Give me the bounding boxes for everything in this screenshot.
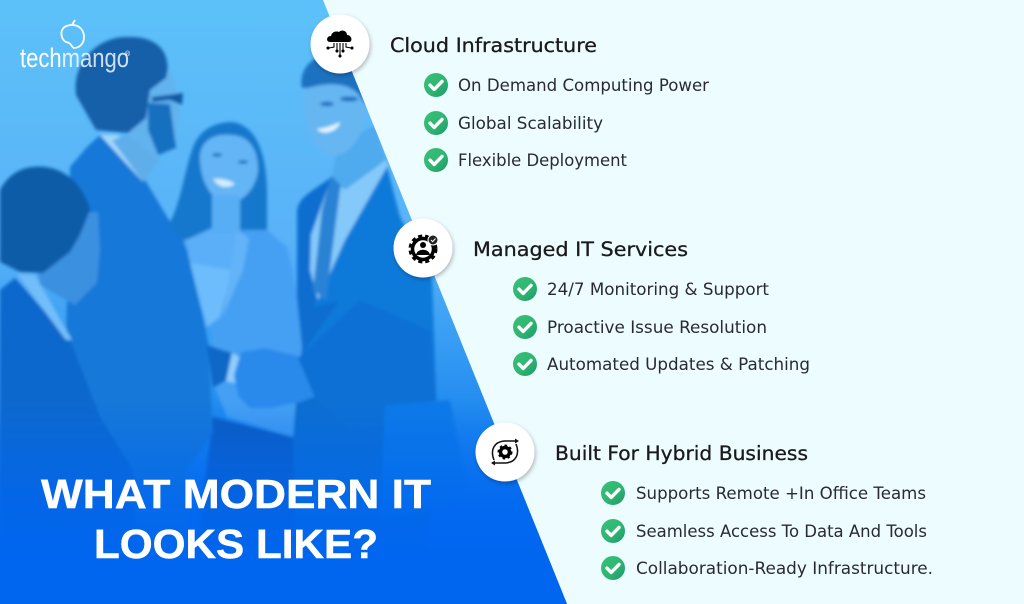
item: Global Scalability	[424, 111, 603, 135]
logo: techmango	[20, 20, 131, 73]
item: Supports Remote +In Office Teams: Supports Remote +In Office Teams	[636, 484, 926, 503]
logo mark: mango outline	[61, 20, 84, 48]
woman	[168, 120, 304, 522]
registered mark: ®	[125, 50, 131, 58]
handshake	[232, 302, 431, 408]
item: Seamless Access To Data And Tools: Seamless Access To Data And Tools	[636, 522, 927, 541]
item: Automated Updates & Patching: Automated Updates & Patching	[547, 355, 810, 374]
logo wordmark: techmango	[20, 43, 129, 73]
item: On Demand Computing Power	[424, 73, 709, 97]
item: Collaboration-Ready Infrastructure.	[601, 556, 933, 580]
icon: cloud network	[310, 14, 370, 74]
icon: gear with person	[394, 218, 452, 278]
item: Flexible Deployment: Flexible Deployment	[458, 151, 628, 170]
right man	[292, 58, 437, 500]
section: Cloud Infrastructure	[310, 14, 709, 172]
bottom gradient fade	[0, 417, 567, 604]
item: Proactive Issue Resolution: Proactive Issue Resolution	[547, 318, 767, 337]
item: Flexible Deployment	[424, 148, 628, 172]
title: LOOKS LIKE?	[94, 521, 378, 567]
heading: Managed IT Services	[473, 238, 688, 261]
item: Automated Updates & Patching	[513, 352, 810, 376]
item: 24/7 Monitoring & Support	[513, 277, 770, 301]
front man	[0, 164, 127, 503]
item: 24/7 Monitoring & Support: 24/7 Monitoring & Support	[547, 280, 770, 299]
item: Global Scalability: Global Scalability	[458, 114, 603, 133]
back man	[64, 35, 242, 488]
section: Built For Hybrid Business	[476, 422, 933, 580]
heading: Cloud Infrastructure	[390, 34, 597, 57]
item: Collaboration-Ready Infrastructure.: Collaboration-Ready Infrastructure.	[636, 559, 933, 578]
title: WHAT MODERN IT	[41, 471, 431, 517]
photo panel: business team handshake	[0, 0, 600, 604]
title	[41, 471, 431, 567]
icon: gear with sync arrows	[476, 422, 534, 482]
heading: Built For Hybrid Business	[555, 442, 808, 465]
section: Managed IT Services	[394, 218, 810, 376]
item: On Demand Computing Power: On Demand Computing Power	[458, 76, 709, 95]
chairs in the background	[383, 399, 459, 490]
item: Proactive Issue Resolution	[513, 315, 767, 339]
